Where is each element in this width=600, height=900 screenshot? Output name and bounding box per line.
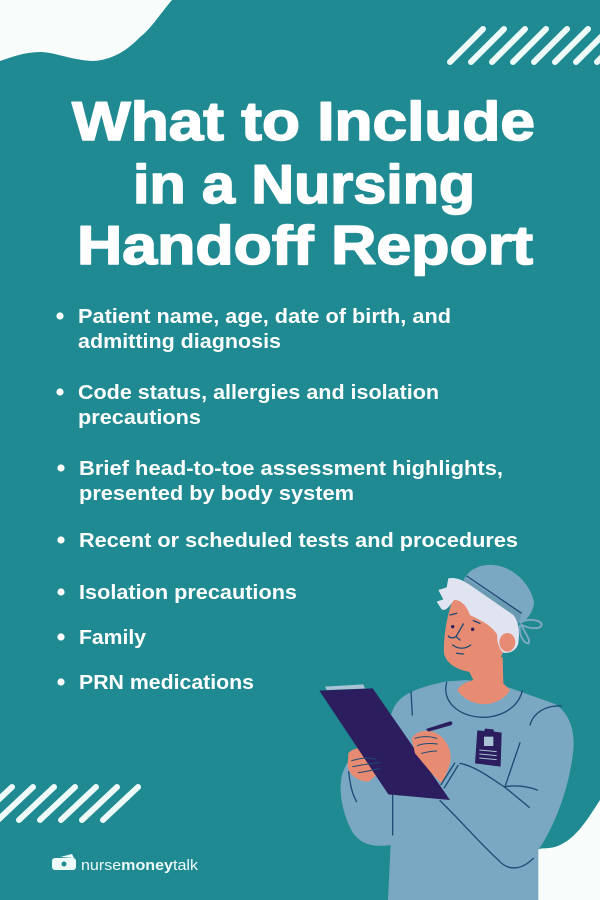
scrubs body — [341, 680, 574, 900]
wordmark: nursemoneytalk — [81, 857, 199, 874]
head — [444, 600, 504, 673]
hair — [437, 578, 519, 653]
bullet: code status: precautions — [78, 407, 201, 429]
hand fingers — [352, 737, 437, 773]
bullet list — [56, 306, 518, 694]
decorative blob: top left — [0, 0, 172, 61]
right hand and wrist — [412, 731, 451, 783]
bullet: tests: Recent or scheduled tests and procedures — [79, 530, 518, 552]
illustration: nurse with clipboard — [319, 565, 574, 900]
title: Handoff Report — [77, 214, 533, 276]
clipboard clip — [325, 684, 365, 690]
title: What to Include — [72, 90, 535, 152]
decorative stripes: bottom left — [0, 787, 138, 820]
cuff — [441, 763, 458, 788]
icon: wallet — [52, 854, 76, 870]
hat ties — [520, 620, 542, 643]
bullet: patient identity — [56, 306, 451, 353]
bullet: family: Family — [79, 627, 147, 649]
title — [72, 90, 535, 276]
pen — [426, 721, 452, 732]
eyes — [451, 625, 474, 631]
bullet: assessment: presented by body system — [79, 483, 354, 505]
bullet: assessment — [57, 458, 503, 505]
neck and chest — [457, 657, 510, 704]
hat band — [463, 577, 522, 624]
clipboard — [319, 688, 450, 800]
decorative blob: bottom right — [538, 800, 600, 900]
title: in a Nursing — [133, 153, 475, 215]
id badge — [475, 729, 502, 767]
ear — [499, 633, 515, 652]
bullet: code status — [56, 382, 439, 429]
hat — [465, 565, 534, 624]
bullet: PRN: PRN medications — [79, 672, 254, 694]
bullet: code status: Code status, allergies and isolation — [78, 382, 439, 404]
bullet: patient identity: Patient name, age, date of birth, and — [78, 306, 451, 328]
logo: nursemoneytalk — [52, 854, 199, 874]
collar and seams — [349, 682, 562, 868]
face details — [448, 613, 480, 654]
left hand — [348, 748, 381, 782]
bullet: assessment: Brief head-to-toe assessment highlights, — [79, 458, 503, 480]
decorative stripes: top right — [450, 29, 600, 62]
bullet: patient identity: admitting diagnosis — [78, 331, 281, 353]
bullet: isolation: Isolation precautions — [79, 582, 297, 604]
